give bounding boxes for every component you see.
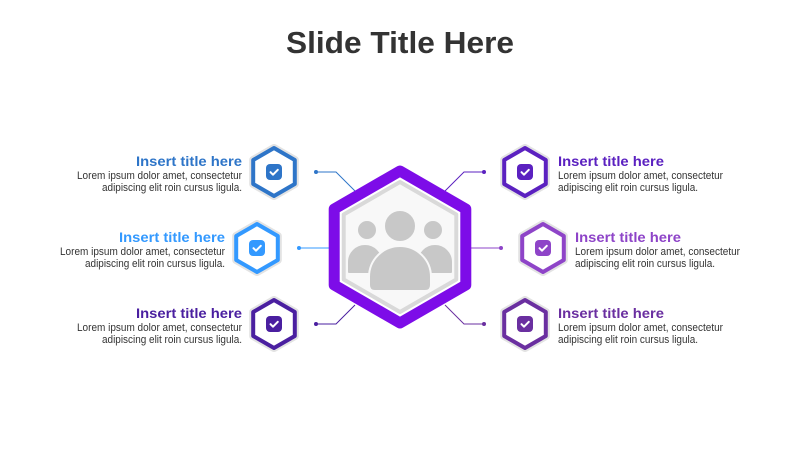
item: right bottom: Lorem ipsum dolor amet, consectetur xyxy=(558,322,723,334)
item: right top: adipiscing elit roin cursus ligula. xyxy=(558,182,698,194)
item: left middle: Insert title here xyxy=(119,229,225,245)
item: left bottom xyxy=(77,300,295,348)
title: Slide Title Here xyxy=(286,25,514,60)
item: right top xyxy=(504,148,723,196)
item: right middle xyxy=(522,224,740,272)
item: right bottom: Insert title here xyxy=(558,305,664,321)
item: right bottom xyxy=(504,300,723,348)
item: left top: Insert title here xyxy=(136,153,242,169)
central hexagon xyxy=(334,171,466,323)
item: left middle: Lorem ipsum dolor amet, consectetur xyxy=(60,246,225,258)
item: left bottom: Lorem ipsum dolor amet, consectetur xyxy=(77,322,242,334)
item: right top: Lorem ipsum dolor amet, consectetur xyxy=(558,170,723,182)
item: left bottom: adipiscing elit roin cursus ligula. xyxy=(102,334,242,346)
item: left bottom: Insert title here xyxy=(136,305,242,321)
item: left top xyxy=(77,148,295,196)
item: right middle: Lorem ipsum dolor amet, consectetur xyxy=(575,246,740,258)
item: right middle: adipiscing elit roin cursus ligula. xyxy=(575,258,715,270)
item: right middle: Insert title here xyxy=(575,229,681,245)
item: left top: Lorem ipsum dolor amet, consectetur xyxy=(77,170,242,182)
icon: people xyxy=(347,210,453,291)
item: left middle: adipiscing elit roin cursus ligula. xyxy=(85,258,225,270)
item: right bottom: adipiscing elit roin cursus ligula. xyxy=(558,334,698,346)
item: right top: Insert title here xyxy=(558,153,664,169)
item: left top: adipiscing elit roin cursus ligula. xyxy=(102,182,242,194)
connectors xyxy=(297,170,503,326)
item: left middle xyxy=(60,224,278,272)
